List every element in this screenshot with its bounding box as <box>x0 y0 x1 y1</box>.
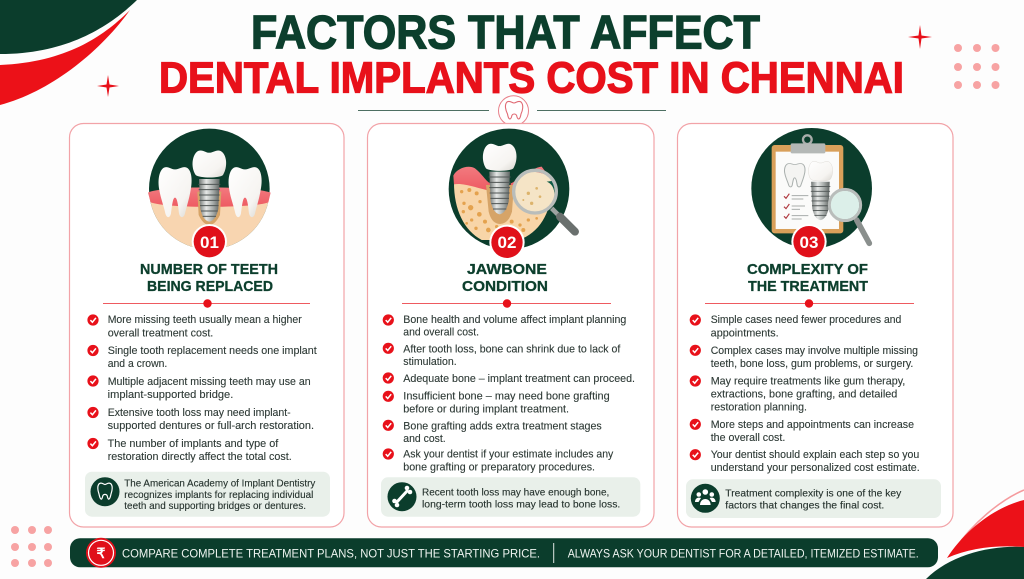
heading divider <box>705 299 914 308</box>
note: academy: recognizes implants for replacing individual <box>124 490 313 501</box>
bullet list: and a crown. <box>108 358 167 370</box>
note: complexity: factors that changes the final cost. <box>725 501 884 512</box>
bullet list: More missing teeth usually mean a higher <box>108 314 302 326</box>
panel: complexity of the treatment <box>678 124 953 527</box>
bullet list: Your dentist should explain each step so you <box>711 449 919 461</box>
bullet list: Ask your dentist if your estimate includes any <box>403 449 614 461</box>
bullet list: Complex cases may involve multiple missing <box>711 345 918 357</box>
icon: rupee <box>86 538 116 568</box>
bullet list <box>108 314 317 463</box>
bullet list: Bone health and volume affect implant planning <box>403 314 626 326</box>
note: academy: teeth and supporting bridges or dentures. <box>124 501 306 512</box>
heading: NUMBER OF TEETH <box>140 262 278 278</box>
bullet list: Insufficient bone – may need bone grafting <box>403 391 610 403</box>
bullet list: May require treatments like gum therapy, <box>711 376 905 388</box>
heading: THE TREATMENT <box>748 279 868 295</box>
step number 03: 03 <box>800 233 818 252</box>
bullet list: teeth, bone loss, gum problems, or surgery. <box>711 358 913 370</box>
note: academy: The American Academy of Implant Dentistry <box>124 479 316 490</box>
banner message right: ALWAYS ASK YOUR DENTIST FOR A DETAILED, ITEMIZED ESTIMATE. <box>568 546 919 560</box>
bullet list: understand your personalized cost estimate. <box>711 462 920 474</box>
banner message left: COMPARE COMPLETE TREATMENT PLANS, NOT JUST THE STARTING PRICE. <box>122 546 540 560</box>
illustration: jawbone and magnifier <box>449 129 575 260</box>
heading: BEING REPLACED <box>147 279 273 295</box>
title divider with tooth icon <box>358 96 666 126</box>
bullet list: restoration planning. <box>711 402 807 414</box>
icon: rupee: ₹ <box>97 545 106 561</box>
note: bone loss: long-term tooth loss may lead to bone loss. <box>422 499 620 510</box>
bullet list: before or during implant treatment. <box>403 404 569 416</box>
note: academy <box>85 472 330 517</box>
bullet list: More steps and appointments can increase <box>711 419 914 431</box>
title: DENTAL IMPLANTS COST IN CHENNAI <box>159 54 904 102</box>
check icons <box>87 314 99 449</box>
bullet list: supported dentures or full-arch restoration. <box>108 420 314 432</box>
bullet list: bone grafting or preparatory procedures. <box>403 461 595 473</box>
bullet list: and cost. <box>403 433 446 445</box>
bullet list: implant-supported bridge. <box>108 389 233 401</box>
illustration: clipboard and magnifier <box>751 128 872 259</box>
bullet list: restoration directly affect the total cost. <box>108 451 292 463</box>
step number 02: 02 <box>498 233 516 252</box>
check icons <box>690 314 701 460</box>
heading: COMPLEXITY OF <box>747 262 868 278</box>
bullet list: Multiple adjacent missing teeth may use an <box>108 376 311 388</box>
bullet list: the overall cost. <box>711 432 785 444</box>
title <box>159 6 904 102</box>
decoration: left sparkle <box>97 75 119 97</box>
title: FACTORS THAT AFFECT <box>251 6 760 58</box>
bullet list: Simple cases need fewer procedures and <box>711 314 901 326</box>
decoration: right sparkle <box>908 25 932 49</box>
step number 01: 01 <box>200 233 219 252</box>
heading <box>140 262 278 295</box>
bullet list: The number of implants and type of <box>108 438 279 450</box>
illustration: teeth and implant <box>147 129 273 259</box>
note: bone loss: Recent tooth loss may have enough bone, <box>422 487 609 498</box>
bullet list: After tooth loss, bone can shrink due to lack of <box>403 343 621 355</box>
decoration: top-right dots <box>954 44 1000 89</box>
note: complexity <box>686 479 941 518</box>
bullet list <box>403 314 635 473</box>
panel: number of teeth <box>70 124 344 527</box>
bullet list: overall treatment cost. <box>108 328 213 340</box>
bullet list: Adequate bone – implant treatment can proceed. <box>403 373 635 385</box>
bullet list: extractions, bone grafting, and detailed <box>711 389 897 401</box>
note: complexity: Treatment complexity is one of the key <box>725 489 902 500</box>
note: bone loss <box>381 477 640 517</box>
heading divider <box>103 299 310 308</box>
decoration: bottom-left dots <box>11 526 52 567</box>
check icons <box>383 314 394 460</box>
heading divider <box>402 299 611 308</box>
heading: JAWBONE <box>467 262 547 278</box>
bullet list: Single tooth replacement needs one implant <box>108 345 317 357</box>
bullet list: Bone grafting adds extra treatment stages <box>403 420 602 432</box>
bullet list: stimulation. <box>403 356 457 368</box>
bullet list: Extensive tooth loss may need implant- <box>108 407 291 419</box>
bullet list: and overall cost. <box>403 327 479 339</box>
decoration: top-left swoosh <box>0 0 137 105</box>
heading: CONDITION <box>462 279 548 295</box>
magnifier <box>514 168 575 232</box>
heading <box>747 262 868 295</box>
bullet list: appointments. <box>711 328 779 340</box>
bullet list <box>711 314 920 474</box>
decoration: bottom-right swoosh <box>926 490 1024 579</box>
bottom banner <box>70 538 938 568</box>
panel: jawbone condition <box>368 124 654 527</box>
heading <box>462 262 548 295</box>
